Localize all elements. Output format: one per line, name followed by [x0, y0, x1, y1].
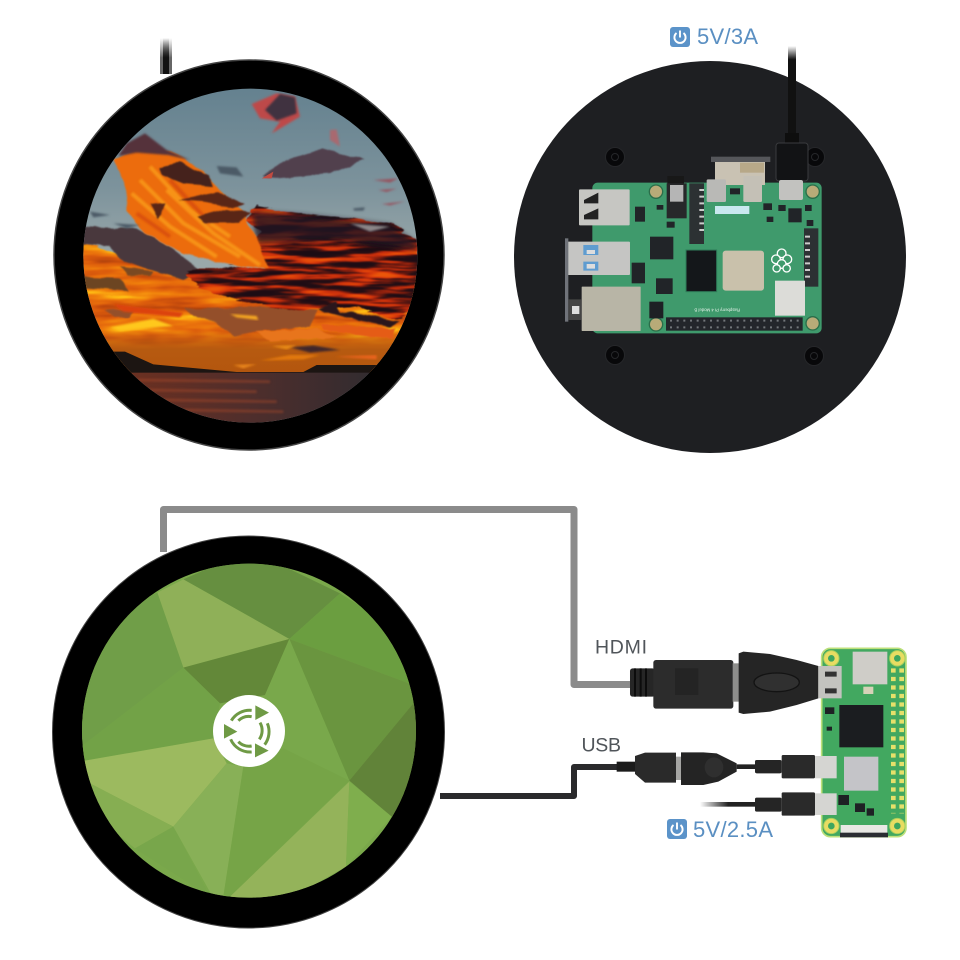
camera connector [841, 825, 887, 833]
brown mid band [105, 308, 137, 317]
power cable and USB-C plug [776, 46, 808, 200]
wireless shield [844, 757, 878, 791]
GPIO holes [893, 668, 902, 813]
display bezel [54, 60, 444, 450]
chips [632, 188, 813, 294]
back plate [514, 61, 906, 453]
lower streak clouds [290, 345, 340, 353]
display connectors [689, 183, 704, 244]
GPIO header [666, 317, 803, 331]
icon and label: 5V/3A power [670, 24, 758, 49]
green polygon wallpaper [82, 564, 416, 898]
USB OTG adapter [617, 752, 837, 785]
mounting screws [606, 148, 824, 366]
mounting holes [824, 651, 905, 834]
wireless module [775, 281, 805, 316]
icon and label: 5V/2.5A power: 5V/2.5A [693, 817, 773, 842]
icon and label: 5V/3A power: 5V/3A [697, 24, 758, 49]
board silkscreen: Raspberry Pi 4 Model B [694, 308, 740, 313]
Raspberry Pi 4 board [565, 157, 822, 333]
orange lower clouds [80, 243, 423, 373]
high clouds [252, 93, 300, 133]
SoC [839, 705, 883, 747]
gold mounting holes [649, 185, 819, 331]
Raspberry logo [772, 249, 792, 272]
small components [825, 707, 874, 816]
panel: round display front with green wallpaper [52, 536, 444, 928]
SoC [723, 251, 764, 291]
HDMI plugs [715, 162, 765, 185]
USB ports [579, 189, 630, 225]
label: HDMI: HDMI [595, 636, 647, 658]
PoE header [649, 302, 663, 318]
HDMI adapter [630, 652, 842, 714]
micro USB power cable [700, 792, 837, 816]
micro ports [707, 179, 726, 202]
bottom smooth glow [103, 332, 398, 373]
cable: top-left display cable [160, 38, 172, 74]
dark lumps in bank [318, 303, 400, 327]
label: USB: USB [582, 734, 621, 756]
dark crown of bank [252, 212, 417, 250]
display bezel [52, 536, 444, 928]
arrow: USB black cable [440, 767, 620, 796]
arrow: HDMI grey cable [164, 510, 640, 684]
panel: round display back with Raspberry Pi 4 [514, 46, 906, 453]
water [132, 372, 370, 423]
grey-brown band [80, 227, 200, 280]
audio jack [667, 176, 684, 184]
panel: Raspberry Pi Zero 2 W with adapters [617, 648, 906, 837]
panel: round display front with sunset [54, 60, 444, 450]
sunset photo [80, 87, 423, 429]
Zero board [822, 648, 906, 837]
ethernet port [582, 287, 641, 331]
big orange cloud [113, 148, 268, 269]
SD card slot [853, 652, 887, 684]
RAM chip [686, 250, 717, 292]
dark red cloud bank [185, 206, 420, 320]
horizon land [113, 352, 380, 373]
label sticker [715, 206, 749, 214]
MATE logo disc [213, 695, 285, 767]
